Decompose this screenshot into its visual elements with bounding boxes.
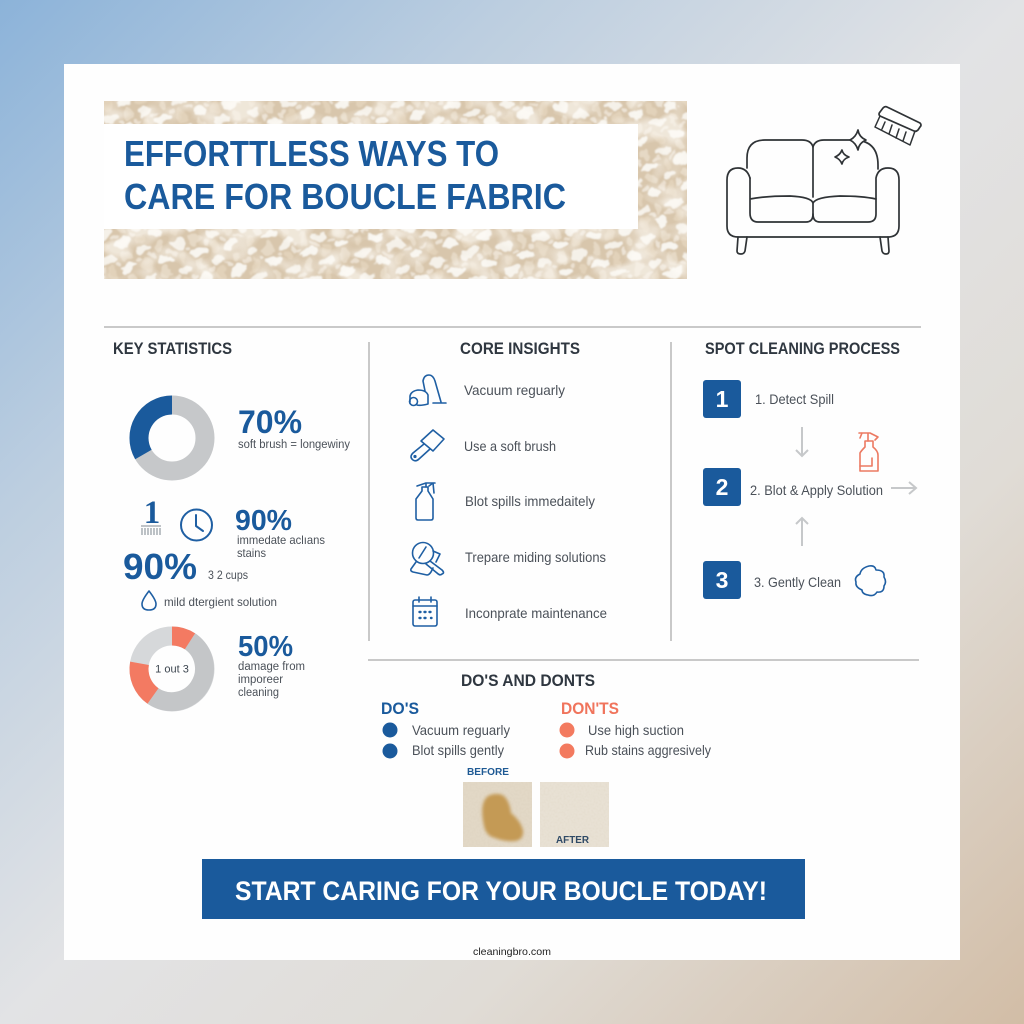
heading: core insights: CORE INSIGHTS: [460, 339, 580, 358]
before image with stain: [463, 766, 532, 847]
after image: AFTER: [556, 834, 589, 846]
stat: 90 percent immediate action: immedate aclıans: [237, 533, 325, 547]
call to action banner: [202, 859, 805, 919]
column: do's: [381, 699, 510, 758]
icon: sponge cloth: [856, 566, 886, 596]
insight: spray bottle: [416, 483, 595, 520]
white content card: [64, 64, 960, 960]
insight: vacuum: Vacuum reguarly: [464, 382, 565, 398]
column: do's: Vacuum reguarly: [412, 722, 510, 738]
call to action banner: START CARING FOR YOUR BOUCLE TODAY!: [235, 876, 767, 906]
insight: calendar: Inconprate maintenance: [465, 605, 607, 621]
insight: spray bottle: Blot spills immedaitely: [465, 493, 595, 509]
heading: key statistics: KEY STATISTICS: [113, 339, 232, 358]
icon: clock: [181, 510, 212, 540]
insight: vacuum: [410, 375, 565, 406]
column: don'ts: [560, 699, 711, 758]
text: mild detergent: mild dtergient solution: [164, 595, 277, 609]
icon: numeral one with brush: 1: [144, 495, 160, 531]
insight: calendar: [413, 597, 607, 626]
stat: 90 percent immediate action: stains: [237, 546, 266, 560]
insight: brush: Use a soft brush: [464, 438, 556, 454]
chart: donut 1 out of 3: [139, 636, 205, 702]
heading: spot cleaning process: SPOT CLEANING PROCESS: [705, 339, 900, 358]
step 3: [703, 561, 841, 599]
footer source: cleaningbro.com: [473, 946, 551, 958]
arrow: up: [796, 518, 808, 546]
title banner: [104, 101, 687, 279]
title text: CARE FOR BOUCLE FABRIC: [124, 176, 566, 217]
icon: water drop: [142, 591, 156, 610]
insight: magnifier with cloth: [411, 542, 606, 575]
before image with stain: BEFORE: [467, 766, 509, 778]
stat: 90 percent immediate action: [235, 505, 325, 560]
stat: 90 percent mild solution: 90%: [123, 546, 197, 587]
stat: 50 percent: damage from: [238, 661, 305, 673]
step 2: 2: [716, 474, 728, 500]
stat: 70 percent: [238, 404, 350, 451]
divider: column rule right: [670, 342, 672, 641]
divider: column rule left: [368, 342, 370, 641]
stat: 50 percent: cleaning: [238, 687, 279, 699]
column: don'ts: Rub stains aggresively: [585, 742, 711, 758]
after image: [540, 782, 609, 847]
stat: 50 percent: 50%: [238, 631, 293, 663]
step 1: [703, 380, 834, 418]
column: don'ts: Use high suction: [588, 722, 684, 738]
column: do's: Blot spills gently: [412, 742, 504, 758]
column: don'ts: DON'TS: [561, 699, 619, 718]
title plate: [104, 124, 638, 229]
step 2: [703, 468, 883, 506]
insight: brush: [411, 430, 556, 461]
chart: donut 1 out of 3: 1 out 3: [155, 664, 189, 676]
heading: do's and donts: DO'S AND DONTS: [461, 671, 595, 690]
title text: [124, 133, 566, 217]
stat: 70 percent: 70%: [238, 404, 302, 440]
column: do's: DO'S: [381, 699, 419, 718]
divider: top horizontal rule: [104, 326, 921, 328]
stat: 90 percent mild solution: 3 2 cups: [208, 570, 248, 582]
panel: key statistics: [113, 339, 350, 702]
step 1: 1: [716, 386, 729, 412]
panel: spot cleaning process: [703, 339, 916, 599]
icon: sofa with brush and sparkles: [727, 107, 921, 254]
arrow: down: [796, 427, 808, 456]
arrow: right: [891, 482, 916, 494]
panel: do's and don'ts: [381, 671, 711, 847]
stat: 90 percent immediate action: 90%: [235, 505, 292, 537]
stat: 50 percent: [238, 631, 305, 699]
step 3: 3: [716, 567, 728, 593]
insight: magnifier with cloth: Trepare miding solutions: [465, 549, 606, 565]
chart: donut 70 percent: [139, 405, 205, 471]
stat: 70 percent: soft brush = longewiny: [238, 439, 350, 451]
title text: EFFORTTLESS WAYS TO: [124, 133, 499, 174]
panel: core insights: [410, 339, 607, 626]
icon: coral spray bottle: [859, 433, 878, 471]
stat: 50 percent: imporeer: [238, 674, 283, 686]
step 3: 3. Gently Clean: [754, 574, 841, 590]
step 2: 2. Blot & Apply Solution: [750, 482, 883, 498]
divider: lower horizontal rule: [368, 659, 919, 661]
step 1: 1. Detect Spill: [755, 391, 834, 407]
fabric texture band: [104, 101, 687, 279]
stat: 90 percent mild solution: [123, 546, 248, 587]
